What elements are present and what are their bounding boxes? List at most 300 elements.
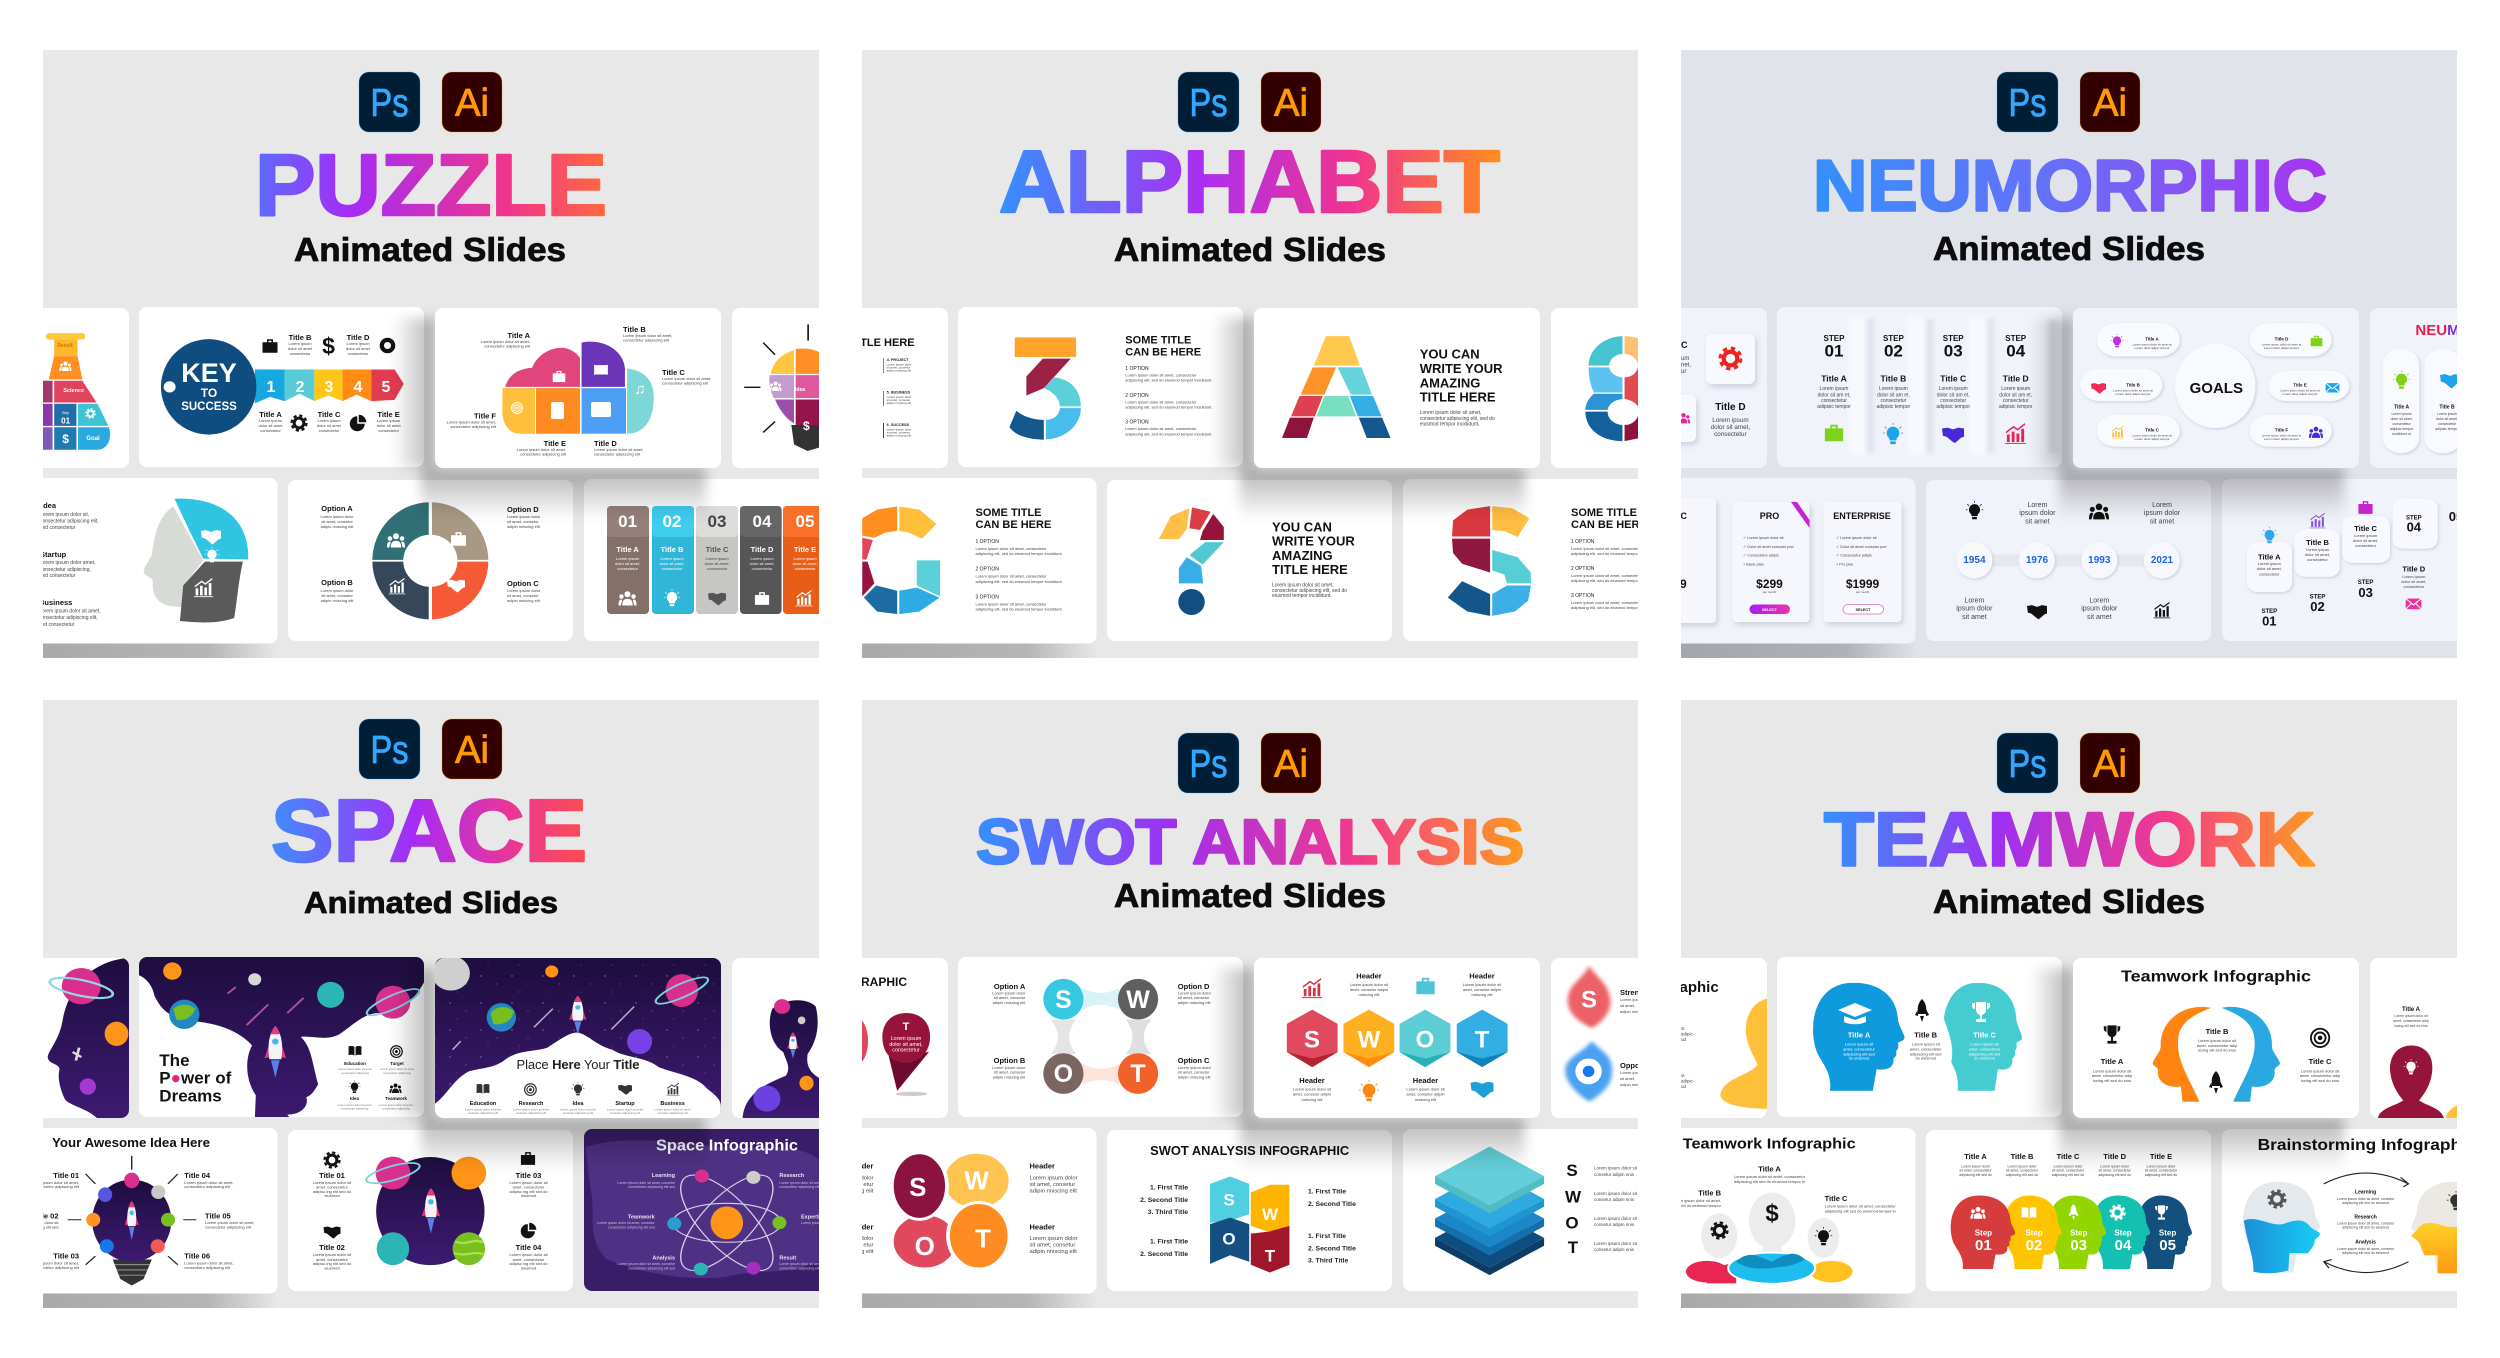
icon: Illustrator badge — [1261, 733, 1321, 793]
step labels: Lorem ipsum — [2306, 547, 2330, 552]
step labels: Lorem ipsum — [2354, 533, 2378, 538]
card: neumorphic pills: Lorem ipsum — [2437, 412, 2457, 416]
labels: Lorem ipsum dolor amet, — [40, 560, 95, 566]
labels: adipiscing elit sed do eiusmod — [2342, 1226, 2389, 1230]
labels: adipin nniscing elit — [507, 524, 541, 529]
column 03: Title C — [706, 545, 729, 554]
lists: 2. Second Title — [1140, 1197, 1188, 1204]
column 05: Lorem ipsum — [793, 556, 817, 561]
labels: amet, consectetur — [513, 1257, 545, 1262]
step columns — [1817, 334, 2033, 444]
number 3 — [1009, 337, 1081, 440]
icon: Photoshop badge — [1178, 72, 1239, 132]
labels: S — [1566, 1161, 1578, 1180]
labels — [628, 1173, 826, 1262]
head labels: Lorem ipsum dolor — [1961, 1164, 1991, 1168]
labels: Strengths — [1620, 988, 1655, 997]
card: idea bulb — [19, 1128, 278, 1294]
card: flask: Result — [57, 343, 73, 349]
person — [2378, 1045, 2461, 1119]
key labels: Title C — [318, 410, 341, 419]
labels: Header — [1469, 971, 1495, 980]
head silhouette — [47, 958, 130, 1119]
head labels: Lorem ipsum dolor — [2054, 1164, 2083, 1168]
pill labels: Lorem ipsum dolor sit amet at — [2262, 434, 2301, 438]
labels: g elit — [861, 1249, 874, 1255]
pill labels: Lorem ipsum dolor sit amet at — [2262, 342, 2301, 346]
key labels — [258, 333, 401, 433]
card: space infographic: consectetur adipiscing elit sed — [608, 1225, 655, 1229]
space scene — [432, 956, 721, 1121]
head labels: 02 — [2026, 1237, 2042, 1254]
column 02 — [652, 506, 694, 614]
icon: Photoshop badge: Ps — [2008, 82, 2046, 125]
key labels: consectetur — [319, 428, 340, 433]
text: adipiscing elit, sed do eiusmod tempor incididunt. — [1125, 431, 1212, 436]
card: neumorphic pills: Lorem ipsum — [2391, 412, 2412, 416]
column 03: dolor sit amet, — [704, 561, 730, 566]
text: Lorem ipsum dolor sit amet, — [1272, 582, 1334, 588]
card: gear tile — [1671, 308, 1767, 468]
labels: Option C — [1178, 1056, 1210, 1065]
card: teamwork infographic: Teamwork Infographic — [2121, 968, 2311, 985]
card: light bulb puzzle: $ — [803, 419, 810, 433]
list items: Lorem ipsum dolor — [887, 395, 911, 399]
card: neumorphic pills — [2370, 308, 2470, 468]
pill labels: Title D — [2275, 336, 2289, 342]
head labels: Step — [2159, 1228, 2176, 1237]
labels: adipisc ing elit sed do — [509, 1261, 548, 1266]
labels: eiusmod — [324, 1266, 340, 1270]
labels: Lorem ipsum dolor sit amet, — [1672, 1198, 1721, 1203]
list items: adipin nniscing elit — [887, 434, 911, 438]
labels: Lorem ipsum dolor — [320, 514, 354, 519]
text: CAN BE HERE — [1571, 519, 1647, 531]
pill labels: Title B — [2126, 382, 2141, 387]
card: neumorphic pills: NEUM — [2415, 322, 2460, 339]
labels: Title 05 — [205, 1212, 231, 1220]
labels: Teamwork — [385, 1096, 407, 1101]
card: hexagons: T — [1475, 1027, 1490, 1054]
step labels: Title A — [2258, 552, 2281, 562]
labels: Title D — [1715, 402, 1746, 413]
labels — [1681, 340, 1750, 438]
text: adipiscing elit, sed do eiusmod tempor incididunt. — [976, 551, 1063, 556]
pill labels: Title A — [2145, 336, 2159, 342]
labels: Target — [390, 1061, 404, 1066]
cloud labels: consectetur adipiscing elit — [484, 344, 531, 348]
labels — [19, 1171, 254, 1270]
key labels: Lorem ipsum — [259, 418, 283, 423]
icon: Photoshop badge: Ps — [1190, 82, 1228, 125]
heads row — [1951, 1196, 2192, 1269]
labels: nniscing elit — [1302, 1097, 1323, 1102]
card: quotation shape: GRAPHIC — [852, 975, 907, 989]
step labels: Title C — [2354, 524, 2378, 533]
labels: Title C — [1973, 1031, 1996, 1040]
pill labels: Lorem dolor adipin tempor — [2264, 346, 2299, 350]
labels: adipin nniscing elit — [993, 1074, 1026, 1079]
card: goals — [2073, 308, 2359, 468]
cloud labels: Lorem ipsum dolor sit amet, — [447, 420, 496, 424]
column 03: 03 — [708, 512, 726, 531]
card: five columns — [584, 479, 833, 641]
cloud labels: Lorem ipsum dolor sit amet, — [662, 376, 711, 381]
text: st — [1681, 1073, 1685, 1078]
step labels: STEP — [2358, 580, 2373, 586]
step labels: Title B — [2306, 538, 2329, 547]
labels: iscing elit sed do eius — [2301, 1078, 2339, 1083]
pricing tile ENTERPRISE: + Pro plan — [1836, 562, 1853, 566]
step labels: 02 — [2310, 599, 2325, 614]
labels row: Lorem ipsum dolor sit amet — [560, 1107, 596, 1111]
labels: Lorem ipsum dolor sit amet — [338, 1103, 372, 1107]
card: yellow silhouette: Infographic — [1637, 979, 1719, 996]
step columns: Lorem ipsum — [1879, 386, 1908, 392]
labels: Education — [344, 1061, 366, 1066]
pill labels: Title C — [2145, 428, 2160, 432]
card: swot banners — [1107, 1130, 1392, 1291]
labels: Lorem ipsum sit — [1970, 1042, 2000, 1046]
step labels: 04 — [2407, 520, 2422, 535]
key labels: dolor sit amet — [288, 346, 313, 351]
head labels: adipiscing elit sed do — [2006, 1173, 2038, 1177]
labels: dolor — [861, 1176, 873, 1182]
labels: sit amet, consetur — [1178, 995, 1210, 1000]
labels: dolor — [861, 1236, 873, 1242]
labels: adipiscing elit sed — [1843, 1051, 1875, 1056]
card: flask: Step — [62, 411, 69, 415]
subtitle: Animated Slides — [294, 231, 566, 268]
step columns: adipisic tempor — [1936, 404, 1970, 410]
labels: Title A — [1848, 1031, 1871, 1040]
timeline labels: Lorem — [2089, 597, 2109, 604]
labels: consectetur adipiscing — [341, 1071, 369, 1075]
card: swot banners: W — [1262, 1205, 1279, 1224]
card: space infographic: consectetur adipiscing elit sed — [779, 1266, 826, 1270]
key teeth — [161, 339, 404, 435]
column 05: consectetur — [795, 566, 816, 571]
labels: Title 02 — [319, 1243, 345, 1252]
key labels: Lorem ipsum — [377, 418, 401, 423]
labels — [1293, 971, 1502, 1102]
card: overlapping circles: W — [964, 1166, 989, 1196]
icon: Illustrator badge: Ai — [455, 729, 489, 772]
labels: Title A — [2101, 1057, 2124, 1066]
pill labels: Title F — [2275, 428, 2288, 432]
step labels: STEP — [2406, 516, 2422, 522]
card: four circles — [958, 957, 1243, 1117]
SWOT blobs — [892, 1152, 1010, 1269]
timeline labels: sit amet — [1962, 614, 1987, 621]
labels: sed adipiscing elit sed — [19, 1224, 58, 1229]
column 01: Lorem ipsum — [616, 556, 640, 561]
labels: Header — [848, 1223, 873, 1232]
pill tiles — [2383, 349, 2461, 453]
head labels: 03 — [2070, 1237, 2087, 1254]
labels: Lorem ipsum dolor sit amet, — [205, 1220, 254, 1225]
labels: Lorem ipsum dolor sit — [1594, 1216, 1638, 1221]
step labels: dolor sit amet, — [2305, 552, 2330, 557]
labels: Startup — [40, 550, 67, 559]
labels: sed consectetur — [39, 622, 75, 628]
step columns: dolor sit am et, — [1999, 392, 2032, 398]
card: cloud puzzle — [435, 308, 721, 468]
labels: amet, consetur adipin — [1406, 1092, 1445, 1097]
text: SOME TITLE — [976, 507, 1042, 519]
labels: Option A — [321, 504, 353, 513]
labels: Business — [39, 598, 72, 607]
labels: g elit — [861, 1188, 874, 1194]
step columns: STEP — [1824, 334, 1845, 343]
labels: um — [1681, 356, 1689, 362]
labels row: Education — [470, 1101, 497, 1107]
step labels: Title D — [2402, 565, 2426, 574]
labels: sit amet, consetur — [507, 593, 539, 598]
labels: adipisc ing elit sed do — [313, 1189, 352, 1194]
pricing tile left: IC — [1678, 511, 1688, 521]
labels: T — [1568, 1238, 1579, 1257]
card: power of dreams — [136, 957, 428, 1121]
card: key to success: SUCCESS — [181, 401, 237, 413]
labels: Lorem ipsum dolor sit amet, consectetur — [1825, 1204, 1896, 1209]
card: swot banners: T — [1265, 1247, 1276, 1266]
step labels: 01 — [2262, 614, 2277, 628]
labels: Expertise — [801, 1214, 826, 1220]
icon: Illustrator badge: Ai — [2093, 82, 2127, 125]
labels: adipin nniscing elit — [507, 598, 541, 603]
labels: adipin nnis — [1620, 1082, 1639, 1087]
labels: O — [1565, 1213, 1579, 1232]
labels: sit amet, consetur — [994, 1070, 1026, 1075]
column 01: dolor sit amet, — [615, 561, 640, 566]
card: space infographic: Lorem ipsum dolor sit amet, consetur — [617, 1181, 676, 1185]
head illustrations — [1813, 983, 2022, 1091]
list items: adipin nniscing elit — [887, 369, 911, 373]
key labels: Title D — [347, 333, 370, 342]
card: person bulb: iscing elit sed do eius — [2394, 1024, 2428, 1028]
card: four circles: O — [1054, 1060, 1073, 1088]
step labels: consectetur — [2403, 584, 2425, 589]
column highlights — [1849, 317, 2056, 455]
labels: Title 06 — [184, 1252, 210, 1261]
brain heads — [2243, 1173, 2488, 1273]
card: four steps — [1777, 307, 2062, 467]
column 04: consectetur — [752, 566, 773, 571]
labels: adipin nniscing elit — [993, 1000, 1026, 1005]
text: YOU CAN — [1420, 347, 1480, 362]
labels row: Business — [660, 1101, 685, 1107]
text — [1571, 508, 1638, 610]
labels: Lorem ipsum sit — [1845, 1042, 1874, 1046]
labels: Title B — [1914, 1031, 1938, 1040]
labels: etur — [863, 1243, 873, 1249]
cloud illustration — [502, 342, 654, 434]
text: ud — [1681, 1084, 1687, 1089]
timeline labels: sit amet — [2150, 518, 2174, 526]
card: letter A — [1254, 308, 1540, 468]
card: neumorphic pills: dolor sit amet, — [2391, 417, 2413, 421]
labels: etur — [863, 1182, 873, 1188]
labels: sed do eiusmod tempor — [1679, 1203, 1722, 1208]
labels: Option C — [507, 579, 539, 588]
pricing tile left: 9 — [1680, 577, 1687, 591]
card: key to success: $ — [322, 333, 335, 359]
column 03 — [696, 506, 738, 614]
card: hexagons — [1254, 958, 1540, 1118]
heading text: Dreams — [159, 1087, 222, 1106]
pill labels: Lorem ipsum dolor sit amet at — [2132, 342, 2172, 346]
cloud labels: consectetur adipiscing elit — [623, 338, 670, 342]
card: number 3 — [958, 307, 1243, 467]
column 02: consectetur — [662, 566, 683, 571]
labels: Lorem ipsum dolor sit — [2198, 1038, 2237, 1043]
lists: 3. Third Title — [1148, 1209, 1188, 1216]
text: 2 OPTION — [1125, 393, 1149, 399]
step columns: adipisic tempor — [1817, 404, 1851, 410]
text: 1 OPTION — [1571, 539, 1595, 545]
card: flask: $ — [62, 432, 69, 446]
text: Lorem ipsum dolor sit amet, consectetur — [1125, 399, 1197, 404]
card: neumorphic pills: consectetur — [2438, 422, 2457, 426]
text: SOME TITLE — [1571, 507, 1637, 519]
subtitle: Animated Slides — [304, 885, 558, 920]
lists: 2. Second Title — [1308, 1246, 1356, 1252]
labels: consectetur adipiscing — [382, 1106, 410, 1110]
labels — [338, 1046, 414, 1110]
cloud labels: Lorem ipsum dolor sit amet, — [594, 447, 643, 452]
labels: Lorem ipsum dolor sit — [2301, 1068, 2340, 1073]
labels row: Lorem ipsum dolor sit amet — [513, 1107, 549, 1111]
labels: sed consectetur — [40, 573, 76, 579]
pricing tile PRO: ✓ Dolor sit amet consctar pod — [1743, 545, 1793, 549]
labels: amet, consectetur — [1910, 1047, 1942, 1052]
head labels: Title B — [2011, 1152, 2034, 1161]
text: adipiscing elit, sed do eiusmod tempor incididunt. — [976, 579, 1063, 584]
labels: Lorem ipsum dolor sit — [1594, 1166, 1638, 1171]
labels — [1672, 1165, 1896, 1213]
card: blob heads: $ — [1765, 1200, 1779, 1227]
cloud labels: Lorem ipsum dolor sit amet, — [517, 447, 566, 452]
card: four circles: S — [1055, 986, 1072, 1014]
panel: puzzle slides — [43, 50, 819, 658]
list items: 6. SUCCESS — [887, 423, 910, 427]
labels: Title 01 — [53, 1171, 79, 1180]
labels: Lorem ipsum — [1620, 1070, 1644, 1075]
head labels: adipiscing elit sed do — [1959, 1173, 1992, 1177]
pill labels: Lorem dolor adipin tempor — [2282, 392, 2318, 396]
card: quotation shape: T — [903, 1021, 910, 1033]
pill labels: Lorem dolor adipin tempor — [2134, 437, 2170, 441]
labels: Lorem ipsum dolor sit amet — [379, 1103, 413, 1107]
text: eiusmod tempor incididunt. — [1272, 593, 1332, 599]
step columns: Lorem ipsum — [1939, 386, 1968, 392]
card: space infographic: consectetur adipiscing elit sed — [628, 1185, 675, 1189]
labels row: Lorem ipsum dolor sit amet — [655, 1107, 691, 1111]
facing heads — [2153, 1007, 2280, 1102]
list items: 4. PROJECT — [887, 358, 909, 362]
labels: Lorem ipsum dolor — [992, 990, 1026, 995]
labels: consetur adipin nnis — [1594, 1247, 1635, 1252]
card: letter G — [852, 478, 1096, 644]
pricing tile ENTERPRISE: SELECT — [1856, 608, 1871, 612]
pill labels: Lorem dolor adipin tempor — [2134, 346, 2170, 350]
card: key to success: TO — [201, 386, 217, 400]
step tiles — [2247, 499, 2438, 592]
letter G — [862, 507, 940, 614]
labels: Learning — [652, 1173, 675, 1179]
card: ring puzzle — [288, 480, 573, 641]
cloud labels — [447, 325, 711, 456]
labels: Lorem ipsum dolor — [992, 1065, 1026, 1070]
step labels — [2257, 501, 2463, 628]
labels: W — [1565, 1188, 1582, 1206]
step columns: Lorem ipsum — [1820, 386, 1848, 392]
card: timeline: 1976 — [2026, 555, 2049, 566]
panel: teamwork slides — [1681, 700, 2457, 1308]
head labels: 01 — [1975, 1237, 1992, 1254]
labels: Lorem ipsum dolor sit — [1350, 982, 1389, 987]
card: person bulb: Title A — [2402, 1007, 2421, 1013]
labels: sit amet, consetur — [321, 519, 353, 524]
card: flask: Goal — [86, 436, 100, 442]
labels: Title 03 — [516, 1171, 541, 1180]
labels — [1565, 1161, 1638, 1257]
step columns: Title C — [1940, 374, 1966, 384]
column 01: Title A — [616, 545, 639, 554]
pricing tile ENTERPRISE: ✓ Dolor sit amet consctar pod — [1836, 545, 1886, 549]
card: key to success: 3 — [325, 379, 334, 396]
labels: Lorem ipsum dolor sit, — [40, 512, 89, 518]
icon: Photoshop badge — [1178, 733, 1239, 793]
lists — [1140, 1184, 1356, 1265]
card: hexagons: W — [1358, 1027, 1381, 1054]
labels: Lorem ipsum dolor sit — [313, 1252, 352, 1257]
labels — [313, 1152, 548, 1270]
card: idea bulb: Your Awesome Idea Here — [52, 1135, 210, 1150]
text: WRITE YOUR — [1420, 361, 1503, 376]
text: 1 OPTION — [976, 539, 999, 545]
column 05 — [783, 506, 819, 614]
labels: Lorem ipsum dolor sit amet, consetur — [2337, 1222, 2395, 1226]
card: two heads — [1777, 957, 2062, 1117]
list items: sit amet, consetur — [887, 398, 910, 402]
pricing tile PRO — [1732, 502, 1810, 622]
column 01: 01 — [618, 512, 637, 531]
card: quotation shape — [844, 958, 948, 1118]
icon: Illustrator badge: Ai — [1274, 82, 1308, 125]
cloud labels: Lorem ipsum dolor sit amet, — [623, 333, 672, 338]
card: yellow silhouette — [1637, 958, 1771, 1118]
labels — [2337, 1189, 2395, 1255]
step columns: STEP — [1883, 334, 1905, 343]
text: CAN BE HERE — [976, 519, 1051, 531]
step columns: 02 — [1884, 342, 1903, 360]
text: Lorem ipsum dolor sit amet, consectetur — [976, 574, 1047, 579]
text: adipiscing elit, sed do eiusmod tempor — [1571, 605, 1640, 610]
labels row: Idea — [572, 1101, 584, 1107]
text: 3 OPTION — [976, 594, 999, 600]
text: Lorem ipsum dolor sit amet, consectetur — [1125, 372, 1197, 377]
cloud labels: Title B — [623, 325, 646, 334]
icon: Illustrator badge — [1261, 72, 1321, 132]
labels: consectetur adipiscing elit, — [39, 615, 98, 621]
text: ud — [1681, 1037, 1687, 1042]
column 02: dolor sit amet, — [659, 561, 685, 566]
timeline labels: Lorem — [2027, 502, 2047, 509]
labels row: Startup — [615, 1101, 635, 1107]
step labels: dolor sit amet, — [2353, 538, 2378, 543]
